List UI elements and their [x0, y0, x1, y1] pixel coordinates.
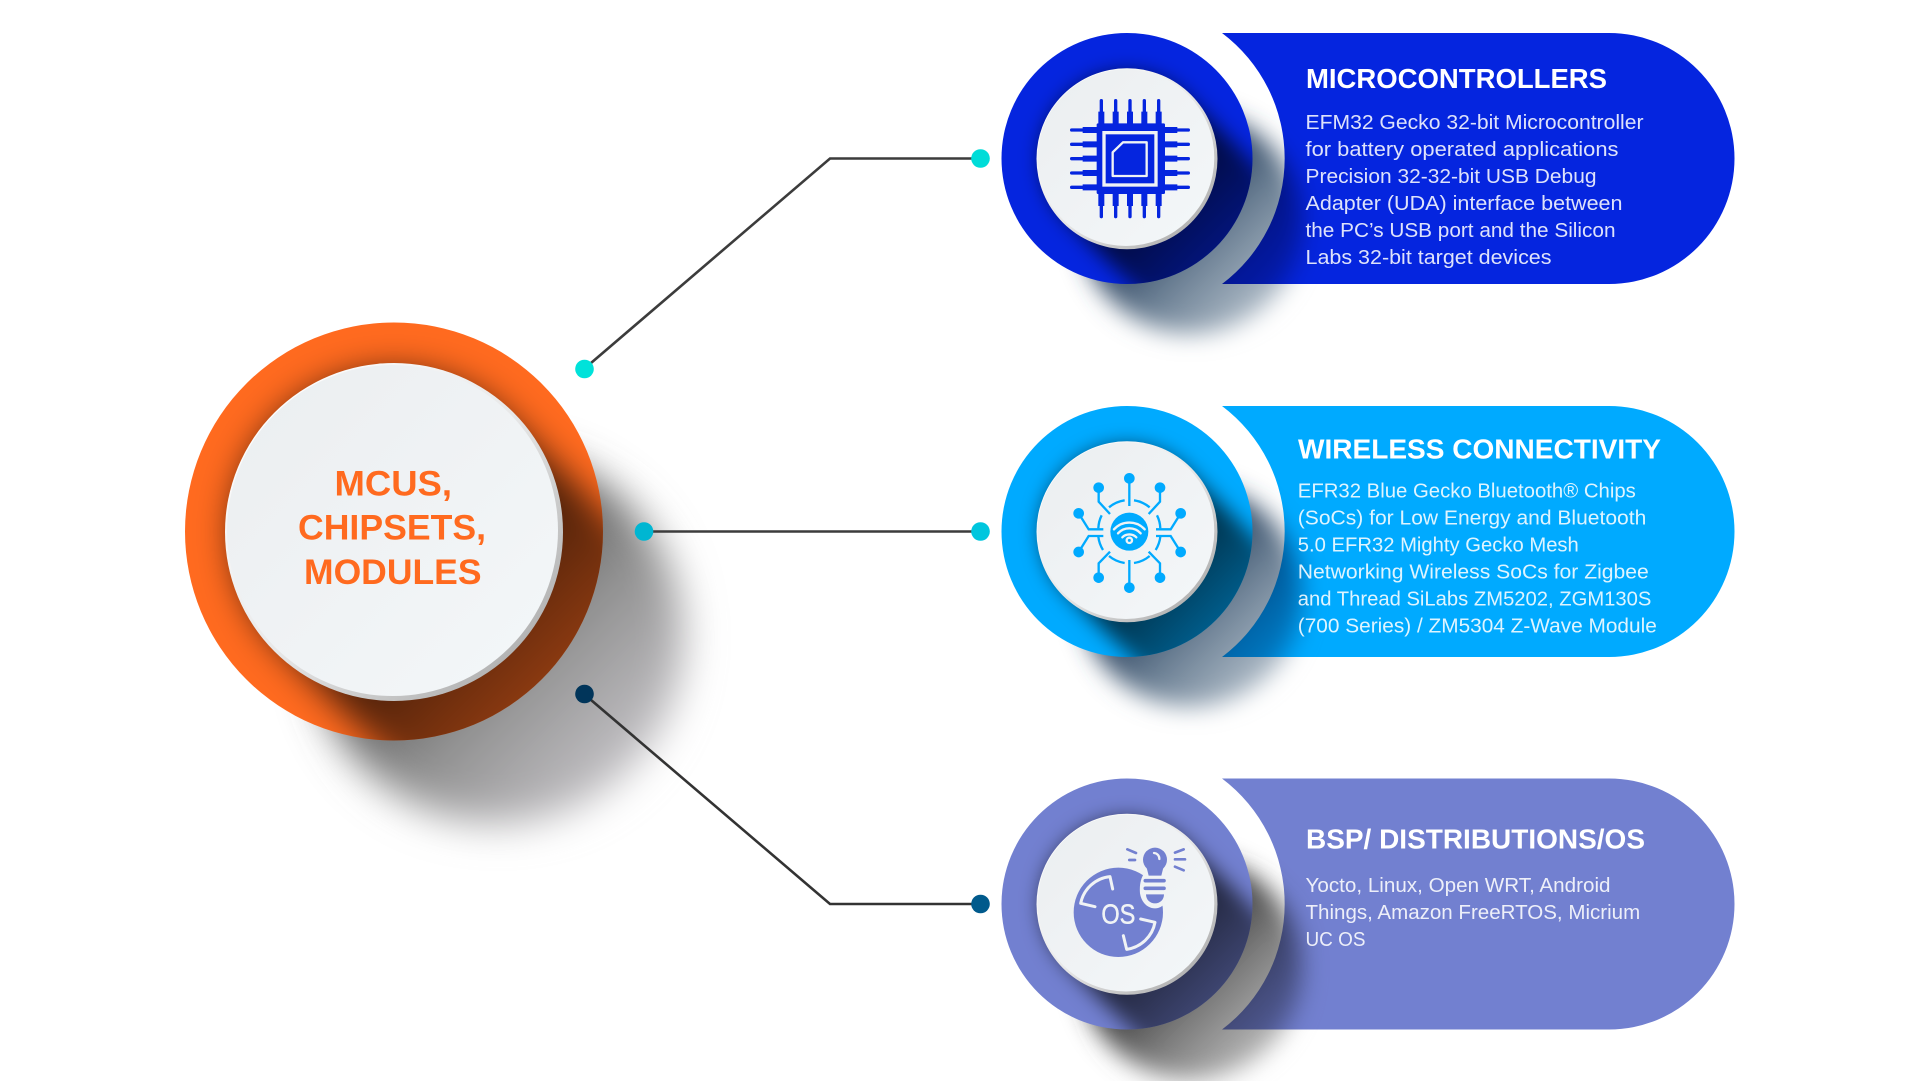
circle shadow [1080, 112, 1302, 334]
body text [1306, 112, 1644, 269]
body text: Networking Wireless SoCs for Zigbee [1298, 562, 1649, 584]
body text: Adapter (UDA) interface between [1306, 193, 1622, 215]
white disc [1036, 814, 1218, 995]
body text: (SoCs) for Low Energy and Bluetooth [1298, 508, 1646, 530]
body text [1298, 481, 1657, 638]
pill background [1222, 406, 1735, 657]
white disc [1036, 68, 1218, 249]
panel: wireless connectivity [1002, 406, 1735, 707]
hub orange ring [185, 322, 603, 740]
connector: hub to wireless connectivity [635, 522, 990, 541]
hub label: MODULES [304, 552, 482, 592]
hub drop shadow [312, 452, 684, 824]
ring inner shadow [1127, 532, 1235, 640]
hub inner long shadow [394, 532, 574, 712]
connector: hub to BSP and OS [575, 685, 990, 913]
pill background [1222, 778, 1735, 1030]
pill background [1222, 33, 1735, 284]
body text: the PC’s USB port and the Silicon [1306, 220, 1616, 242]
body text: Labs 32-bit target devices [1306, 247, 1552, 269]
ring inner shadow [1127, 158, 1235, 266]
icon: microchip [1072, 101, 1188, 217]
body text: 5.0 EFR32 Mighty Gecko Mesh [1298, 535, 1579, 557]
panel: BSP, distributions and OS [1002, 778, 1735, 1080]
heading: MICROCONTROLLERS [1306, 63, 1607, 94]
coloured ring [1002, 33, 1252, 284]
central hub: MCUs, chipsets, modules [185, 322, 684, 824]
body text: Things, Amazon FreeRTOS, Micrium [1306, 902, 1640, 924]
connector: hub to microcontrollers [575, 149, 990, 378]
white disc [1036, 441, 1218, 622]
panel: microcontrollers [1002, 33, 1735, 334]
body text: for battery operated applications [1306, 139, 1618, 161]
coloured ring [1002, 778, 1252, 1030]
icon: globe with OS and light bulb: OS [1101, 898, 1135, 929]
icon: globe with OS and light bulb [1074, 848, 1185, 957]
body text: UC OS [1306, 929, 1366, 951]
body text [1306, 875, 1640, 951]
heading: WIRELESS CONNECTIVITY [1298, 434, 1661, 464]
body text: and Thread SiLabs ZM5202, ZGM130S [1298, 589, 1651, 611]
body text: Yocto, Linux, Open WRT, Android [1306, 875, 1610, 897]
body text: (700 Series) / ZM5304 Z-Wave Module [1298, 616, 1657, 638]
body text: Precision 32-32-bit USB Debug [1306, 166, 1596, 188]
icon: wireless network hub [1073, 473, 1186, 593]
hub label: MCUS, [334, 464, 452, 504]
heading: BSP/ DISTRIBUTIONS/OS [1306, 823, 1645, 854]
ring inner shadow [1127, 904, 1235, 1012]
hub label: CHIPSETS, [298, 508, 486, 548]
coloured ring [1002, 406, 1252, 657]
circle shadow [1080, 485, 1302, 707]
circle shadow [1080, 858, 1302, 1080]
hub label [298, 464, 486, 592]
body text: EFR32 Blue Gecko Bluetooth® Chips [1298, 481, 1636, 503]
hub white disc [225, 363, 563, 701]
body text: EFM32 Gecko 32-bit Microcontroller [1306, 112, 1644, 134]
